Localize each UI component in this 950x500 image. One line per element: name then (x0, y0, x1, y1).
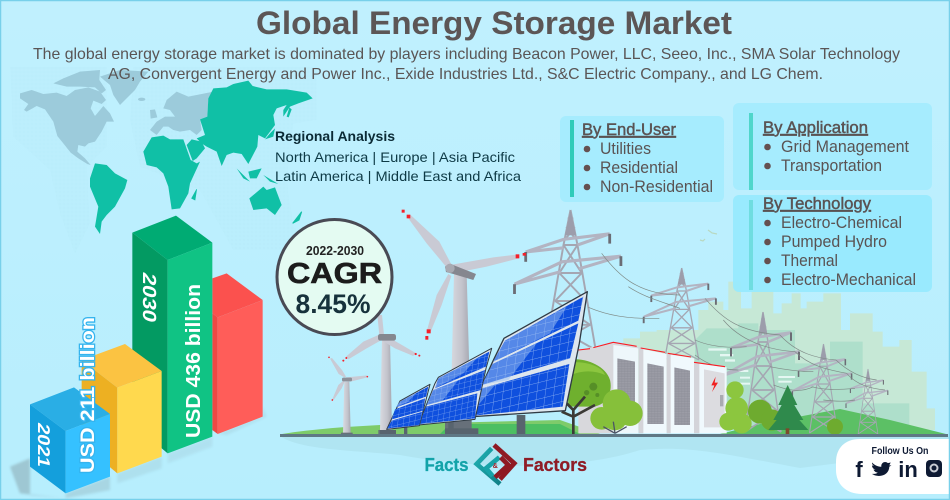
green hills (282, 409, 946, 434)
segment panel: by end-user (560, 116, 724, 202)
red roof lines (578, 342, 725, 367)
new zealand (293, 212, 302, 223)
cityscape (623, 282, 935, 430)
small turbine (328, 356, 368, 435)
segment panel: by end-user: Non-Residential (600, 178, 713, 196)
label usd 436 billion: USD 436 billion (182, 284, 205, 438)
asia (197, 81, 313, 166)
segment panel: by end-user: By End-User (582, 121, 677, 139)
greenland (100, 70, 148, 105)
logo: facts and factors (424, 445, 587, 484)
battery storage building (578, 342, 727, 433)
segment panel: by technology: Pumped Hydro (781, 233, 887, 251)
regional analysis: North America | Europe | Asia Pacific (275, 149, 515, 165)
logo: facts and factors: Facts (424, 454, 468, 475)
panel posts (380, 415, 525, 437)
yellow bar (82, 344, 162, 473)
green bar 2030 (132, 216, 212, 453)
asian islands (237, 107, 292, 184)
arctic islands (53, 70, 106, 93)
title: Global Energy Storage Market (256, 5, 732, 41)
red bar (212, 273, 263, 434)
regional analysis: Latin America | Middle East and Africa (275, 168, 521, 184)
large turbine (402, 210, 526, 433)
ground line (280, 434, 948, 437)
wind turbines (328, 210, 526, 435)
logo mark (477, 445, 514, 484)
footer wave band (280, 436, 950, 470)
segment panel: by application (733, 103, 932, 190)
icon: twitter (872, 462, 891, 476)
madagascar (192, 189, 197, 200)
segment panel: by technology: Electro-Chemical (781, 214, 902, 232)
social follow card (836, 439, 950, 494)
logo mark: & (493, 461, 499, 470)
regional analysis: Regional Analysis (275, 128, 395, 144)
europe (150, 92, 213, 135)
large solar panel (468, 292, 587, 417)
cagr badge: 8.45% (296, 289, 370, 319)
north america (20, 87, 114, 165)
dotted map backdrop (10, 67, 317, 253)
australia (249, 187, 282, 215)
label usd 211 billion: USD 211 billion (77, 317, 99, 473)
medium solar panel (418, 348, 492, 425)
icon: instagram (926, 460, 942, 477)
power lines (588, 253, 885, 401)
logo: facts and factors: Factors (523, 454, 587, 475)
social follow card: Follow Us On (872, 446, 928, 457)
segment panel: by end-user: Utilities (600, 140, 651, 158)
pine tree (768, 385, 808, 430)
label 2021: 2021 (34, 421, 54, 470)
intro text (33, 46, 900, 83)
cagr badge: CAGR (287, 258, 382, 290)
small solar panel (387, 384, 430, 429)
bar shadow (10, 407, 267, 498)
trees (562, 359, 843, 437)
intro text: The global energy storage market is dominated by players including Beacon Power, LLC, Seeo, Inc., SMA Solar Technology (33, 46, 900, 63)
intro text: AG, Convergent Energy and Power Inc., Exide Industries Ltd., S&C Electric Company., and LG Chem. (108, 66, 823, 83)
blue bar 2021 (30, 387, 110, 493)
africa (143, 136, 200, 209)
segment panel: by application: Transportation (781, 157, 882, 175)
world map (10, 67, 317, 253)
birds (700, 230, 717, 241)
transmission towers (513, 210, 888, 434)
bar chart (10, 216, 267, 498)
segment panel: by application: By Application (763, 119, 868, 137)
regional analysis (275, 128, 521, 184)
label 2030: 2030 (138, 270, 159, 324)
segment panel: by technology (733, 195, 932, 292)
iceland and uk (138, 98, 157, 119)
cagr badge (277, 220, 392, 334)
segment panel: by technology: Electro-Mechanical (781, 271, 916, 289)
cagr badge: 2022-2030 (306, 243, 364, 258)
segment panel: by technology: Thermal (781, 252, 838, 270)
switchgear door with lightning icon (704, 369, 725, 427)
south america (90, 163, 127, 234)
segment panel: by application: Grid Management (781, 138, 909, 156)
medium turbine (342, 315, 420, 435)
building windows (617, 358, 690, 425)
segment panel: by end-user: Residential (600, 159, 678, 177)
icon: facebook: f (855, 457, 863, 482)
solar panels (380, 292, 587, 437)
arabia (187, 139, 205, 161)
segment panel: by technology: By Technology (763, 195, 872, 213)
icon: linkedin: in (898, 457, 918, 482)
